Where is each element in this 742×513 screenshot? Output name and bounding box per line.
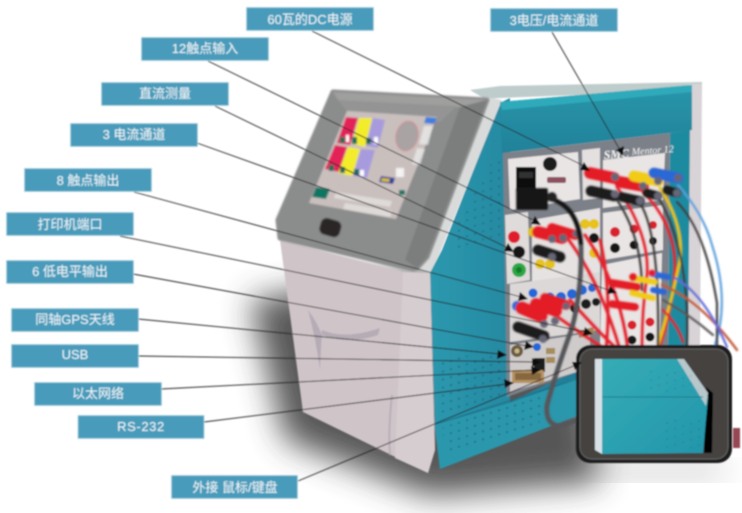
arrow: RS-232 [204, 379, 514, 422]
label: external mouse keyboard [172, 476, 298, 498]
teal lid [500, 85, 692, 153]
label: coaxial GPS antenna: 同轴GPS天线 [35, 312, 115, 327]
right grey pillar [686, 84, 702, 350]
label: 12 contact inputs: 12触点输入 [172, 41, 238, 56]
label: 60W DC power [246, 8, 374, 30]
rear ports [511, 327, 595, 383]
arrow: Ethernet [161, 366, 541, 389]
label: 60W DC power: 60瓦的DC电源 [267, 12, 353, 27]
label: Ethernet [34, 382, 162, 406]
label: 6 low level outputs: 6 低电平输出 [32, 264, 108, 279]
label: coaxial GPS antenna [12, 308, 138, 332]
label: external mouse keyboard: 外接 鼠标/键盘 [192, 480, 278, 495]
arrow: 3 current channels [197, 143, 617, 294]
arrow: external mouse keyboard [298, 362, 582, 481]
logo text: SMC [603, 146, 630, 162]
touch screen console [278, 92, 487, 269]
light band beside console [415, 97, 502, 273]
label: 3 voltage current channels [490, 8, 618, 32]
arrow: coaxial GPS antenna [138, 319, 507, 359]
arrow: 60W DC [312, 31, 590, 171]
top light strip [470, 82, 702, 99]
leader lines and arrows [120, 31, 624, 481]
label: 8 contact outputs: 8 触点输出 [57, 173, 119, 188]
front connector panel [503, 133, 674, 397]
label: DC measurement: 直流测量 [139, 86, 191, 101]
label: Ethernet: 以太网络 [72, 386, 124, 401]
ground shadow [250, 270, 725, 496]
label: 3 current channels [70, 124, 198, 146]
arrow: 6 low level outputs [133, 274, 534, 350]
power cord [516, 188, 581, 426]
arrow: DC measurement [215, 106, 514, 252]
base unit [280, 240, 435, 473]
carrying case [576, 345, 740, 463]
label: USB: USB [62, 347, 88, 362]
case unit [595, 359, 602, 454]
label: 12 contact inputs [142, 38, 268, 60]
label: 8 contact outputs [24, 168, 152, 192]
arrow: USB [138, 356, 542, 367]
screen [309, 111, 437, 219]
power switch [516, 167, 536, 191]
test lead plugs [512, 173, 682, 343]
arrow: printer port [120, 236, 593, 336]
teal side panel [430, 98, 577, 469]
arrow: 8 contact outputs [134, 192, 528, 301]
teal right pillar [668, 130, 690, 350]
label: DC measurement [102, 82, 228, 106]
sockets [508, 219, 657, 344]
wires behind [555, 185, 737, 355]
knob [318, 217, 343, 239]
label: printer port [6, 212, 134, 236]
label: USB [12, 344, 138, 368]
label: RS-232: RS-232 [117, 419, 165, 434]
arrow: 3 voltage current channels [552, 32, 624, 156]
label: printer port: 打印机端口 [37, 217, 103, 232]
front connector panel: Mentor 12 [630, 144, 674, 158]
arrow: 12 contact inputs [208, 61, 541, 225]
label: 6 low level outputs [6, 260, 134, 284]
label: 3 voltage current channels: 3电压/电流通道 [510, 13, 598, 28]
label: RS-232 [78, 416, 204, 438]
black slot [704, 387, 713, 453]
label: 3 current channels: 3 电流通道 [103, 127, 165, 142]
